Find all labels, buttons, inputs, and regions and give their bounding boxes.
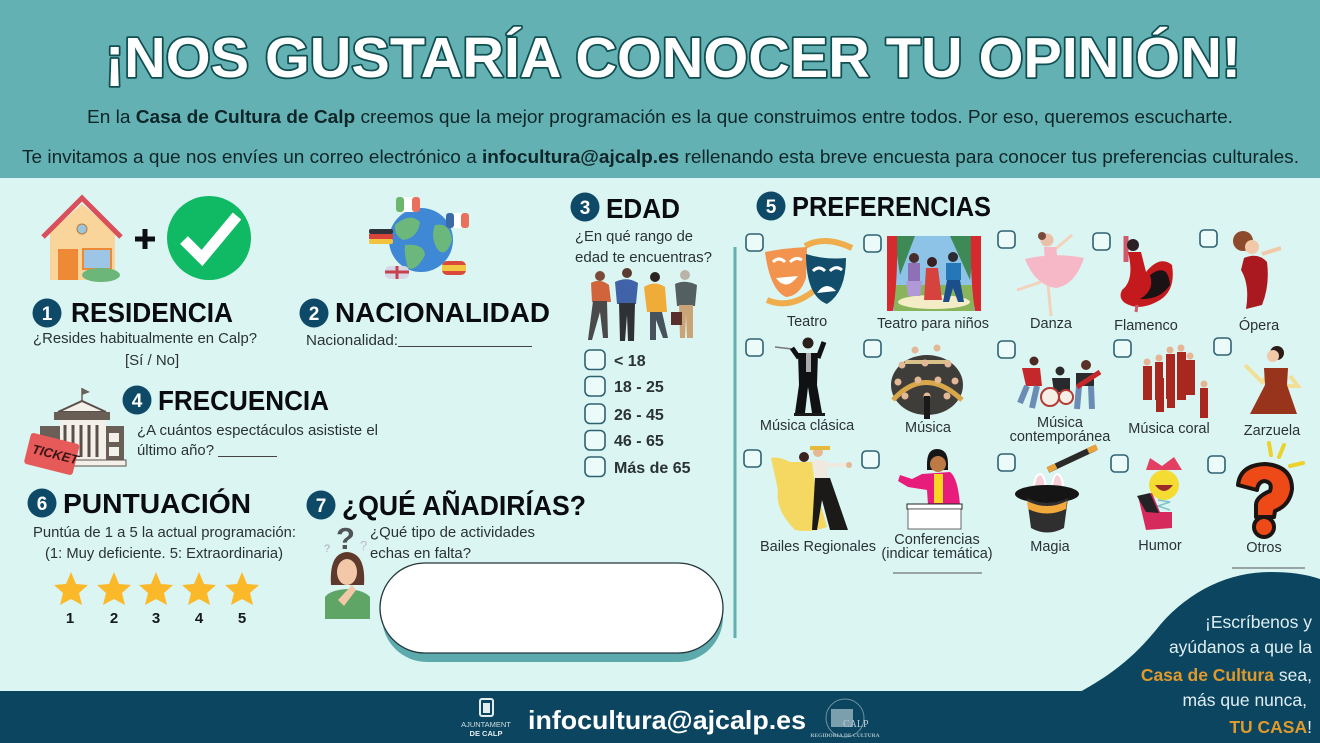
icon: opera singer xyxy=(1233,231,1281,309)
label musica coral: Música coral xyxy=(1128,421,1210,437)
label humor: Humor xyxy=(1138,538,1182,554)
question edad xyxy=(575,228,712,266)
instructions puntuacion: Puntúa de 1 a 5 la actual programación: xyxy=(33,524,296,541)
checkbox list edad: 26 - 45 xyxy=(614,407,664,424)
heading frecuencia: FRECUENCIA xyxy=(158,385,329,416)
callout text: más que nunca, xyxy=(1182,690,1307,710)
field nacionalidad: Nacionalidad: xyxy=(306,332,398,349)
callout text: ayúdanos a que la xyxy=(1169,637,1312,657)
icon: choir xyxy=(1143,344,1208,418)
badge 6: 6 xyxy=(37,494,47,515)
label musica contemporanea: Música xyxy=(1037,415,1084,431)
icon: jack in the box xyxy=(1137,457,1182,530)
checkboxes preferencias xyxy=(744,230,1231,473)
badge 4 xyxy=(122,386,152,414)
icon: rock band xyxy=(1020,356,1100,409)
star rating: 5 xyxy=(238,610,246,627)
star rating: 3 xyxy=(152,610,160,627)
heading nacionalidad: NACIONALIDAD xyxy=(335,297,550,328)
checkbox list edad: < 18 xyxy=(614,353,646,370)
star rating: 2 xyxy=(110,610,118,627)
callout text: Casa de Cultura sea, xyxy=(1141,665,1312,685)
logo regidoria de cultura: CALP xyxy=(843,719,869,730)
logo regidoria de cultura xyxy=(810,699,880,739)
label musica contemporanea xyxy=(1010,415,1111,445)
icon: group of people xyxy=(588,268,697,341)
instructions puntuacion: (1: Muy deficiente. 5: Extraordinaria) xyxy=(45,545,283,562)
label danza: Danza xyxy=(1030,316,1073,332)
icon: zarzuela singer xyxy=(1245,346,1298,414)
label conferencias xyxy=(881,532,993,573)
answer frecuencia xyxy=(137,442,277,459)
heading puntuacion: PUNTUACIÓN xyxy=(63,488,251,519)
logo ajuntament: DE CALP xyxy=(470,729,502,738)
icon: theatre masks xyxy=(765,241,852,304)
checkbox list edad xyxy=(585,350,691,477)
heading edad: EDAD xyxy=(606,193,680,224)
badge 3: 3 xyxy=(580,198,590,219)
icon: house plus check xyxy=(43,196,251,282)
callout text: ¡Escríbenos y xyxy=(1205,612,1312,632)
badge 2 xyxy=(300,298,328,328)
badge 5 xyxy=(756,192,786,220)
logo regidoria de cultura: REGIDORIA DE CULTURA xyxy=(810,733,880,739)
badge 7: 7 xyxy=(316,496,326,517)
icon: orchestra conductor xyxy=(775,338,825,416)
question residencia: ¿Resides habitualmente en Calp? xyxy=(33,330,257,347)
icon: orchestra xyxy=(891,344,963,419)
answer frecuencia: último año? xyxy=(137,442,214,459)
logo ajuntament: AJUNTAMENT xyxy=(461,720,511,729)
label musica clasica: Música clásica xyxy=(760,418,855,434)
badge 3 xyxy=(570,192,600,222)
label musica: Música xyxy=(905,420,952,436)
label teatro: Teatro xyxy=(787,314,827,330)
question que anadirias: ¿Qué tipo de actividades xyxy=(370,524,535,541)
intro line 2: Te invitamos a que nos envíes un correo electrónico a infocultura@ajcalp.es rellenando esta breve encuesta para conocer tus preferencias culturales. xyxy=(22,147,1299,167)
label flamenco: Flamenco xyxy=(1114,318,1178,334)
heading residencia: RESIDENCIA xyxy=(71,297,233,328)
label bailes regionales: Bailes Regionales xyxy=(760,539,876,555)
heading preferencias: PREFERENCIAS xyxy=(792,191,991,222)
icon: theatre for children xyxy=(887,236,981,311)
icon: speaker at lectern xyxy=(898,449,962,529)
section 1: residencia xyxy=(32,297,257,369)
answer box xyxy=(380,563,723,662)
logo ajuntament xyxy=(461,699,511,738)
icon: thinking woman: ? xyxy=(336,521,355,556)
section 2: nacionalidad xyxy=(300,297,550,349)
corner callout xyxy=(1080,572,1320,737)
badge 6 xyxy=(28,488,56,518)
checkbox list edad: 18 - 25 xyxy=(614,379,664,396)
question frecuencia: ¿A cuántos espectáculos asististe el xyxy=(137,422,378,439)
checkbox list edad: 46 - 65 xyxy=(614,433,664,450)
question edad: edad te encuentras? xyxy=(575,249,712,266)
title: ¡NOS GUSTARÍA CONOCER TU OPINIÓN! xyxy=(105,26,1241,90)
star rating xyxy=(54,572,259,627)
label teatro para ninos: Teatro para niños xyxy=(877,316,989,332)
instructions puntuacion xyxy=(33,524,296,562)
icon: building and ticket xyxy=(24,388,126,476)
badge 7 xyxy=(306,490,336,520)
icon: flamenco dancer xyxy=(1121,236,1173,312)
label musica contemporanea: contemporánea xyxy=(1010,429,1111,445)
intro line 1: En la Casa de Cultura de Calp creemos que la mejor programación es la que construimos entre todos. Por eso, queremos escucharte. xyxy=(87,107,1233,127)
section 3: edad xyxy=(570,192,712,477)
badge 2: 2 xyxy=(309,304,319,325)
checkbox list edad: Más de 65 xyxy=(614,460,691,477)
label conferencias: (indicar temática) xyxy=(881,546,993,562)
icon: thinking woman xyxy=(324,521,370,619)
label magia: Magia xyxy=(1030,539,1071,555)
callout text xyxy=(1141,612,1312,737)
icon: thinking woman: ? xyxy=(324,543,330,555)
divider xyxy=(734,247,736,638)
star rating: 4 xyxy=(195,610,204,627)
footer email: infocultura@ajcalp.es xyxy=(528,705,806,735)
question que anadirias xyxy=(370,524,535,562)
answer options: [Sí / No] xyxy=(125,352,179,369)
badge 1: 1 xyxy=(42,304,53,325)
icon: question mark xyxy=(1238,443,1303,537)
section 6: puntuacion xyxy=(28,488,296,627)
section 5: preferencias xyxy=(744,191,1305,573)
callout text: TU CASA! xyxy=(1229,717,1312,737)
section 7: que anadirias xyxy=(306,490,723,662)
label opera: Ópera xyxy=(1239,317,1280,334)
icon: globe with flags xyxy=(369,197,469,279)
heading que anadirias: ¿QUÉ AÑADIRÍAS? xyxy=(342,490,586,521)
label otros: Otros xyxy=(1246,540,1282,556)
star rating: 1 xyxy=(66,610,74,627)
badge 1 xyxy=(32,298,62,328)
label conferencias: Conferencias xyxy=(894,532,980,548)
icon: magic hat xyxy=(1015,447,1097,532)
question edad: ¿En qué rango de xyxy=(575,228,693,245)
label zarzuela: Zarzuela xyxy=(1244,423,1301,439)
question que anadirias: echas en falta? xyxy=(370,545,471,562)
footer band xyxy=(0,691,1320,743)
label otros xyxy=(1232,540,1305,568)
icon: ballerina xyxy=(1017,232,1084,316)
badge 4: 4 xyxy=(132,391,143,412)
badge 5: 5 xyxy=(766,197,777,218)
header band xyxy=(0,0,1320,178)
icon: regional dancers xyxy=(771,447,852,531)
icon: thinking woman: ? xyxy=(360,538,367,553)
icon: building and ticket: TICKET xyxy=(31,441,81,468)
section 4: frecuencia xyxy=(122,385,378,459)
